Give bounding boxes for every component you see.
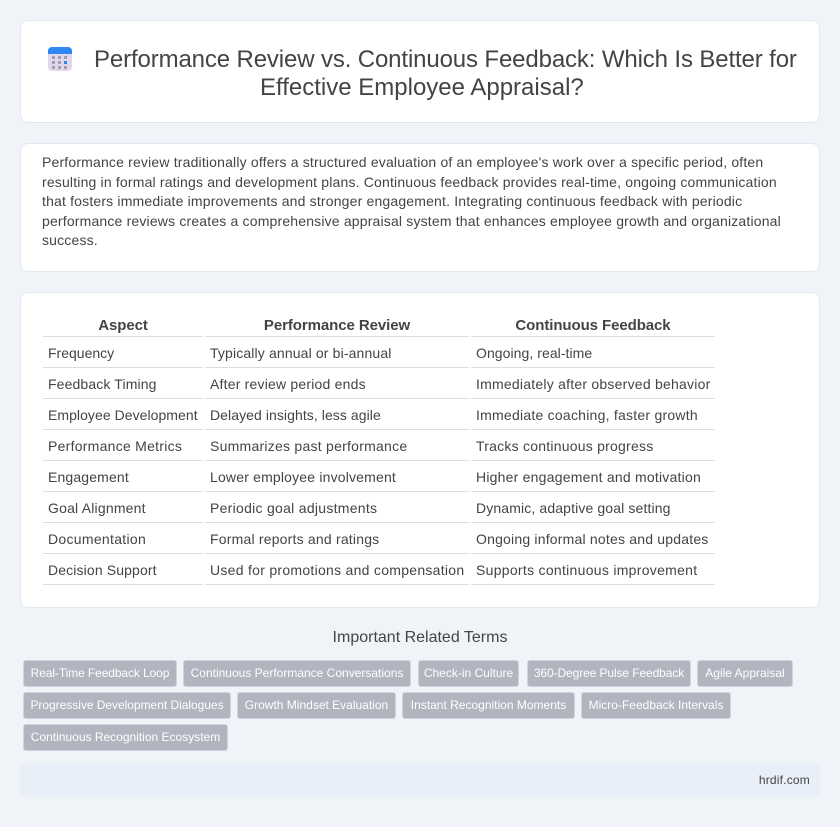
comparison table: Employee Development	[48, 407, 198, 423]
related terms tags: Continuous Performance Conversations	[191, 666, 403, 680]
related terms tags: Continuous Recognition Ecosystem	[31, 730, 220, 744]
table card	[20, 292, 820, 608]
comparison table: Used for promotions and compensation	[210, 562, 464, 578]
related terms tags: Growth Mindset Evaluation	[245, 698, 388, 712]
comparison table: Feedback Timing	[48, 376, 157, 392]
intro text: success.	[42, 232, 98, 248]
related terms tags: Agile Appraisal	[705, 666, 785, 680]
footer	[20, 763, 820, 797]
comparison table: Ongoing informal notes and updates	[476, 531, 709, 547]
related terms tags	[23, 660, 793, 751]
comparison table: Lower employee involvement	[210, 469, 396, 485]
comparison table: Performance Metrics	[48, 438, 182, 454]
intro text: that fosters immediate improvements and stronger engagement. Integrating continuous feedback with periodic	[42, 193, 742, 209]
comparison table: Periodic goal adjustments	[210, 500, 377, 516]
comparison table: Frequency	[48, 345, 114, 361]
related terms tags: 360-Degree Pulse Feedback	[534, 666, 684, 680]
related terms tags: Check-in Culture	[424, 666, 513, 680]
related terms heading: Important Related Terms	[333, 629, 507, 646]
comparison table: Typically annual or bi-annual	[210, 345, 392, 361]
comparison table: Decision Support	[48, 562, 157, 578]
comparison table: Supports continuous improvement	[476, 562, 697, 578]
comparison table: Tracks continuous progress	[476, 438, 653, 454]
intro text: performance reviews creates a comprehensive appraisal system that enhances employee growth and organizational	[42, 213, 781, 229]
intro text: resulting in formal ratings and development plans. Continuous feedback provides real-time, ongoing communication	[42, 174, 777, 190]
title: Performance Review vs. Continuous Feedback: Which Is Better for	[94, 46, 797, 73]
comparison table: Continuous Feedback	[515, 317, 671, 334]
title: Effective Employee Appraisal?	[260, 74, 584, 101]
intro text	[42, 154, 781, 248]
comparison table	[43, 317, 715, 585]
comparison table: Engagement	[48, 469, 129, 485]
related terms tags: Real-Time Feedback Loop	[31, 666, 169, 680]
related terms tags: Progressive Development Dialogues	[30, 698, 224, 712]
icon: calendar	[48, 47, 72, 71]
intro text: Performance review traditionally offers a structured evaluation of an employee's work over a specific period, often	[42, 154, 763, 170]
comparison table: Immediately after observed behavior	[476, 376, 710, 392]
comparison table: Formal reports and ratings	[210, 531, 379, 547]
related terms tags: Micro-Feedback Intervals	[589, 698, 723, 712]
comparison table: Higher engagement and motivation	[476, 469, 701, 485]
title	[94, 46, 797, 101]
header card	[20, 20, 820, 123]
comparison table: Dynamic, adaptive goal setting	[476, 500, 671, 516]
intro card	[20, 143, 820, 272]
footer source: hrdif.com	[759, 773, 810, 787]
table header: Aspect	[98, 317, 148, 334]
comparison table: Immediate coaching, faster growth	[476, 407, 698, 423]
comparison table: Summarizes past performance	[210, 438, 407, 454]
comparison table: Performance Review	[264, 317, 410, 334]
comparison table: Ongoing, real-time	[476, 345, 592, 361]
related terms tags: Instant Recognition Moments	[411, 698, 566, 712]
comparison table: After review period ends	[210, 376, 366, 392]
comparison table: Goal Alignment	[48, 500, 146, 516]
comparison table: Delayed insights, less agile	[210, 407, 381, 423]
comparison table: Documentation	[48, 531, 146, 547]
